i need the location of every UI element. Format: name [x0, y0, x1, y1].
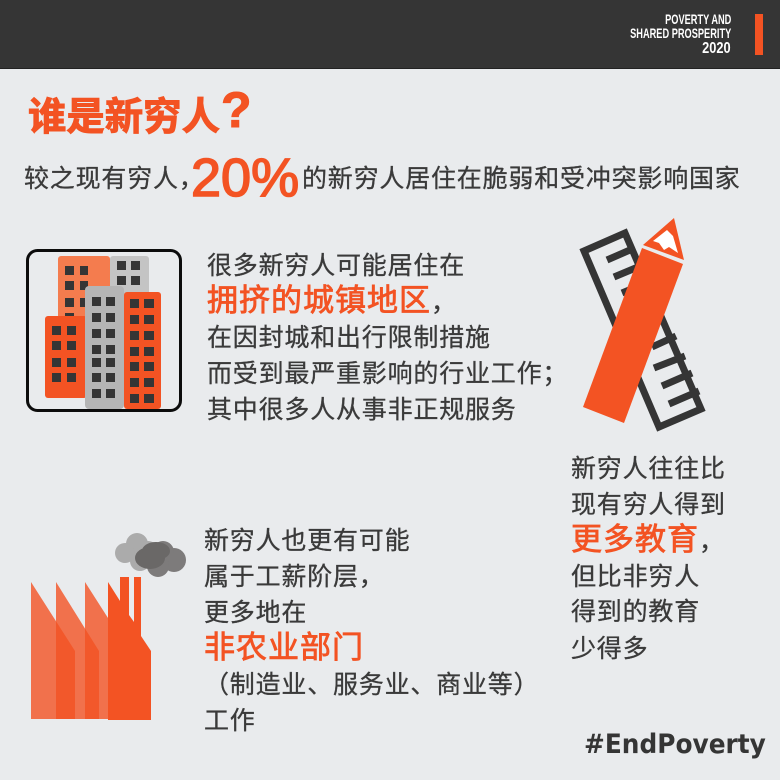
header accent bar [755, 14, 763, 55]
subtitle with 20% statistic: 20% [191, 148, 299, 208]
header bar [0, 0, 780, 69]
text block: more education: 新穷人往往比 [571, 449, 726, 485]
text block: crowded urban areas: 很多新穷人可能居住在 [207, 246, 465, 282]
text block: more education: 现有穷人得到 [571, 485, 726, 521]
text block: more education [571, 449, 726, 665]
header text: report name: POVERTY AND [665, 11, 731, 27]
text block: more education: 得到的教育 [571, 592, 700, 628]
header text: report name [630, 11, 732, 57]
subtitle with 20% statistic [24, 148, 741, 208]
text block: crowded urban areas: 而受到最严重影响的行业工作； [207, 354, 568, 390]
text block: wage workers in non-farm sectors: 非农业部门 [204, 622, 364, 667]
text block: wage workers in non-farm sectors: 工作 [204, 701, 256, 737]
text block: wage workers in non-farm sectors: 更多地在 [204, 593, 307, 629]
text block: wage workers in non-farm sectors: （制造业、服务业、商业等） [204, 665, 539, 701]
hashtag: #EndPoverty [584, 729, 766, 760]
text block: crowded urban areas: 在因封城和出行限制措施 [207, 318, 491, 354]
text block: crowded urban areas: 拥挤的城镇地区， [207, 275, 457, 320]
text block: more education: 更多教育， [571, 514, 725, 559]
text block: wage workers in non-farm sectors: 属于工薪阶层， [204, 557, 385, 593]
header text: report name: SHARED PROSPERITY [630, 25, 731, 41]
text block: wage workers in non-farm sectors: 新穷人也更有可能 [204, 521, 410, 557]
header text: report name: 2020 [703, 40, 731, 57]
title: 谁是新穷人? [28, 82, 252, 139]
subtitle with 20% statistic: 较之现有穷人， [24, 159, 205, 195]
text block: more education: 少得多 [571, 629, 648, 665]
text block: more education: 但比非穷人 [571, 557, 700, 593]
subtitle with 20% statistic: 的新穷人居住在脆弱和受冲突影响国家 [302, 159, 741, 195]
text block: crowded urban areas [207, 246, 568, 426]
text block: wage workers in non-farm sectors [204, 521, 539, 737]
text block: crowded urban areas: 其中很多人从事非正规服务 [207, 390, 517, 426]
